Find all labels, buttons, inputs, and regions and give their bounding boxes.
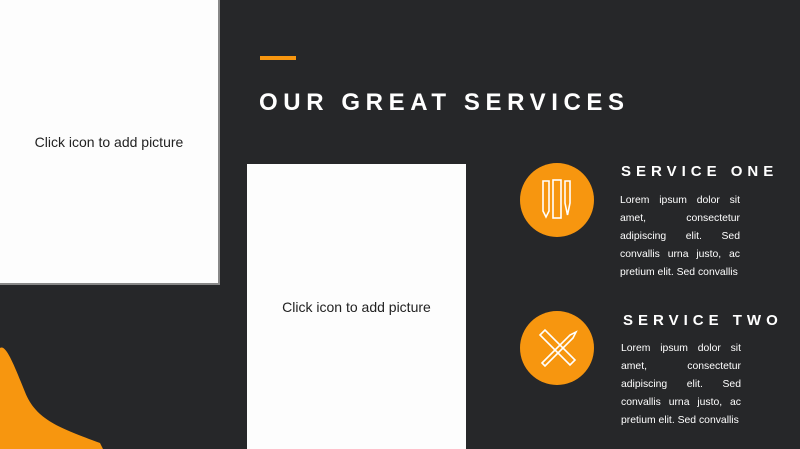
icon: crossed pencil ruler [520, 311, 594, 385]
picture placeholder 2 [247, 164, 466, 449]
service two text: Lorem ipsum dolor sit amet, consectetur adipiscing elit. Sed convallis urna justo, ac pretium elit. Sed convallis [621, 343, 741, 426]
accent bar [260, 56, 296, 60]
picture placeholder 1 [0, 0, 220, 285]
service two heading: SERVICE TWO [623, 312, 783, 329]
orange blob [0, 348, 103, 449]
title: OUR GREAT SERVICES [259, 89, 630, 116]
picture placeholder 2: Click icon to add picture [282, 298, 431, 314]
picture placeholder 1: Click icon to add picture [35, 134, 183, 150]
icon: pencil ruler pen [520, 163, 594, 237]
service one text: Lorem ipsum dolor sit amet, consectetur adipiscing elit. Sed convallis urna justo, ac pretium elit. Sed convallis [620, 195, 740, 278]
service one heading: SERVICE ONE [621, 163, 778, 180]
